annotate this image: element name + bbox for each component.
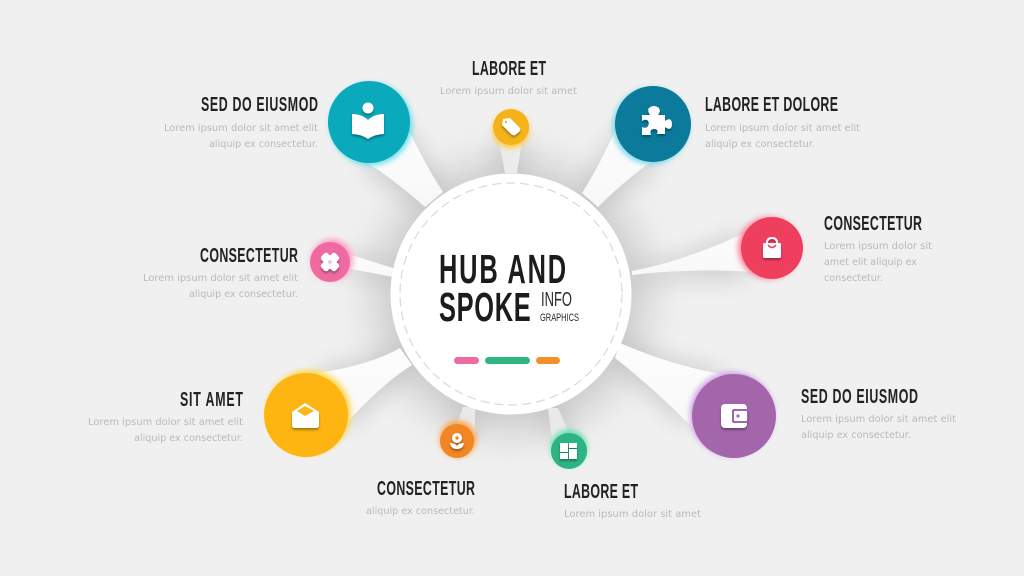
- label: sit amet: [88, 388, 243, 444]
- label: labore et dolore: Lorem ipsum dolor sit amet elit: [705, 123, 860, 134]
- label: labore et (top): [440, 57, 577, 97]
- label: consectetur (left): CONSECTETUR: [200, 244, 298, 267]
- spoke: pink: [335, 250, 393, 277]
- label: sed do eiusmod (left): aliquip ex consectetur.: [209, 139, 318, 150]
- icon: shopping bag: [763, 238, 781, 258]
- label: sed do eiusmod (right): aliquip ex consectetur.: [801, 430, 911, 441]
- hub title: GRAPHICS: [540, 312, 579, 324]
- node: orange flower: [440, 421, 476, 458]
- node: dark teal puzzle: [613, 86, 691, 164]
- label: consectetur (right): consectetur.: [824, 273, 883, 284]
- label: consectetur (bottom): CONSECTETUR: [377, 477, 475, 500]
- label: consectetur (right): CONSECTETUR: [824, 212, 922, 235]
- icon: bandage: [320, 252, 340, 272]
- label: consectetur (right): [824, 212, 932, 284]
- icon: open book: [352, 102, 384, 139]
- label: labore et (bottom): [564, 480, 701, 520]
- label: labore et (top): Lorem ipsum dolor sit amet: [440, 86, 577, 97]
- spoke: red: [632, 228, 755, 275]
- hub title: HUB AND: [439, 247, 566, 293]
- icon: puzzle piece: [642, 106, 672, 135]
- label: labore et dolore: aliquip ex consectetur.: [705, 139, 815, 150]
- label: sed do eiusmod (left): [164, 93, 318, 150]
- label: labore et (bottom): LABORE ET: [564, 480, 638, 503]
- node: yellow tag: [493, 109, 529, 148]
- spoke: dark teal: [582, 120, 660, 207]
- spoke: amber: [318, 348, 412, 430]
- label: sed do eiusmod (left): Lorem ipsum dolor sit amet elit: [164, 123, 318, 134]
- colour bars: [454, 357, 560, 364]
- label: consectetur (bottom): aliquip ex consectetur.: [366, 506, 475, 517]
- label: consectetur (left): [143, 244, 298, 300]
- hub title: INFO: [541, 289, 572, 311]
- spoke: orange: [455, 407, 475, 435]
- spoke: green: [548, 408, 572, 440]
- node: pink bandage: [310, 239, 353, 282]
- icon: layout grid: [560, 443, 577, 459]
- spoke: teal: [360, 118, 443, 207]
- icon: open envelope: [292, 403, 319, 428]
- label: sit amet: Lorem ipsum dolor sit amet elit: [88, 417, 243, 428]
- label: consectetur (right): amet elit aliquip ex: [824, 257, 917, 268]
- icon: tag: [502, 118, 520, 135]
- label: sed do eiusmod (right): [801, 385, 956, 441]
- dashed ring: [400, 183, 622, 405]
- node: green layout: [551, 430, 587, 469]
- label: labore et (bottom): Lorem ipsum dolor sit amet: [564, 509, 701, 520]
- node: teal book: [328, 81, 412, 165]
- label: sed do eiusmod (left): SED DO EIUSMOD: [201, 93, 318, 116]
- hub title: SPOKE: [439, 285, 531, 331]
- label: consectetur (left): Lorem ipsum dolor sit amet elit: [143, 273, 298, 284]
- icon: wallet: [721, 404, 748, 428]
- label: labore et dolore: LABORE ET DOLORE: [705, 93, 838, 116]
- label: consectetur (bottom): [366, 477, 475, 517]
- spoke: yellow: [498, 135, 523, 173]
- hub title: [439, 247, 579, 331]
- node: amber envelope: [264, 370, 351, 457]
- node: red bag: [738, 217, 803, 279]
- label: sed do eiusmod (right): Lorem ipsum dolor sit amet elit: [801, 414, 956, 425]
- label: sit amet: SIT AMET: [180, 388, 243, 411]
- hub shadow: [377, 162, 645, 430]
- label: sed do eiusmod (right): SED DO EIUSMOD: [801, 385, 918, 408]
- spoke: purple: [615, 343, 725, 430]
- label: consectetur (left): aliquip ex consectetur.: [189, 289, 298, 300]
- spoke shadows: [320, 125, 745, 435]
- label: labore et dolore: [705, 93, 860, 150]
- icon: flower: [450, 433, 464, 449]
- label: labore et (top): LABORE ET: [472, 57, 546, 80]
- label: consectetur (right): Lorem ipsum dolor sit: [824, 241, 932, 252]
- central hub: [390, 174, 632, 414]
- label: sit amet: aliquip ex consectetur.: [134, 433, 243, 444]
- spokes: [318, 118, 755, 440]
- node: purple wallet: [690, 372, 776, 458]
